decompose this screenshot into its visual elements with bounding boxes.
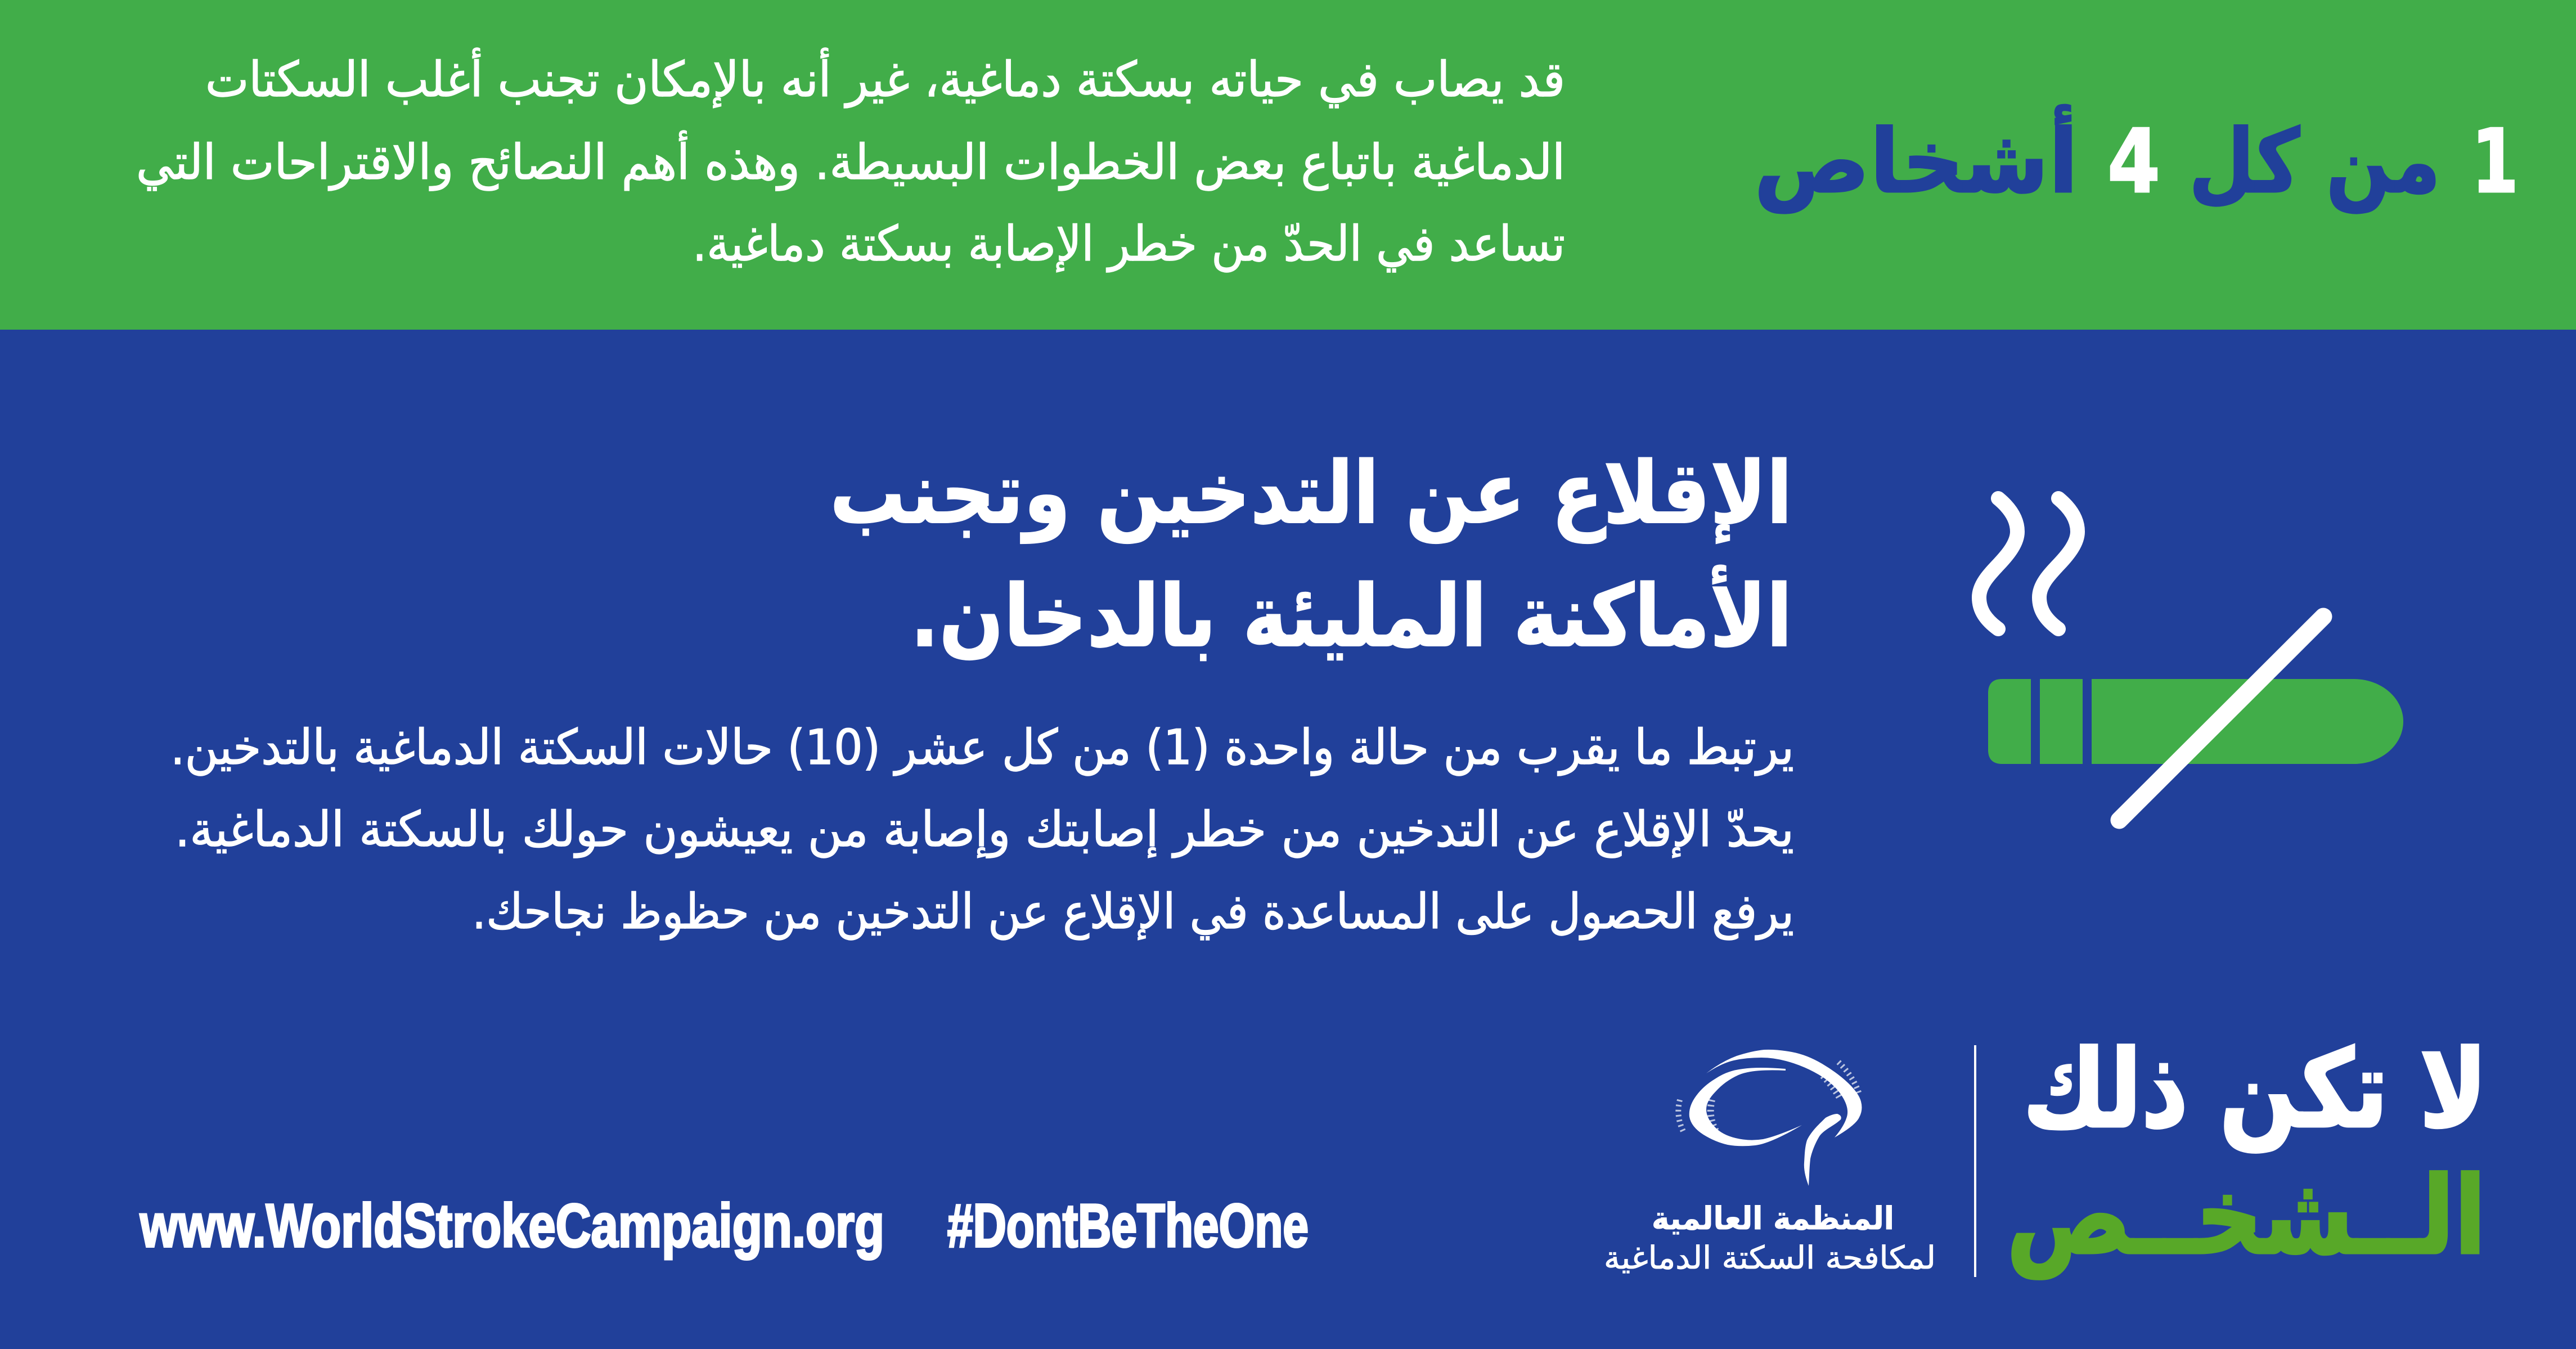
- banner paragraph: تساعد في الحدّ من خطر الإصابة بسكتة دماغية.: [693, 216, 1565, 273]
- icon: head and brain swirl: [1678, 1050, 1862, 1186]
- banner heading: 1 in 4 people: 1: [2471, 110, 2519, 213]
- body text: يرفع الحصول على المساعدة في الإقلاع عن التدخين من حظوظ نجاحك.: [472, 884, 1794, 941]
- campaign slogan line 1: لا تكن ذلك: [2023, 1027, 2487, 1153]
- footer hashtag: #DontBeTheOne: [947, 1191, 1309, 1260]
- banner heading: 1 in 4 people: [1754, 104, 2519, 213]
- banner heading: 1 in 4 people: 4: [2107, 110, 2160, 213]
- icon: strike-through line: [2119, 617, 2323, 820]
- panel: green top banner: [0, 0, 2576, 330]
- campaign slogan line 2: الــشخــص: [2007, 1154, 2486, 1279]
- banner paragraph: قد يصاب في حياته بسكتة دماغية، غير أنه بالإمكان تجنب أغلب السكتات: [205, 48, 1565, 109]
- banner paragraph: [136, 48, 1565, 273]
- icon: smoke wisps: [1979, 498, 2078, 629]
- logo: World Stroke Organization: [1604, 1050, 1936, 1276]
- logo name line 1: المنظمة العالمية: [1652, 1200, 1894, 1237]
- logo name line 2: لمكافحة السكتة الدماغية: [1604, 1240, 1936, 1276]
- banner heading: 1 in 4 people: أشخاص: [1754, 104, 2078, 213]
- body text: يحدّ الإقلاع عن التدخين من خطر إصابتك وإصابة من يعيشون حولك بالسكتة الدماغية.: [175, 802, 1794, 858]
- banner paragraph: الدماغية باتباع بعض الخطوات البسيطة. وهذه أهم النصائح والاقتراحات التي: [136, 131, 1565, 191]
- banner heading: 1 in 4 people: من كل: [2189, 110, 2440, 213]
- body text: [170, 720, 1794, 941]
- main heading: الإقلاع عن التدخين وتجنب: [830, 443, 1792, 544]
- icon: no smoking cigarette: [1979, 498, 2403, 820]
- icon: cigarette body: [1988, 679, 2403, 764]
- footer website url: www.WorldStrokeCampaign.org: [140, 1191, 884, 1260]
- main heading: الأماكنة المليئة بالدخان.: [910, 565, 1792, 666]
- divider: [1974, 1045, 1976, 1277]
- body text: يرتبط ما يقرب من حالة واحدة (1) من كل عشر (10) حالات السكتة الدماغية بالتدخين.: [170, 720, 1794, 776]
- main heading: [830, 443, 1792, 666]
